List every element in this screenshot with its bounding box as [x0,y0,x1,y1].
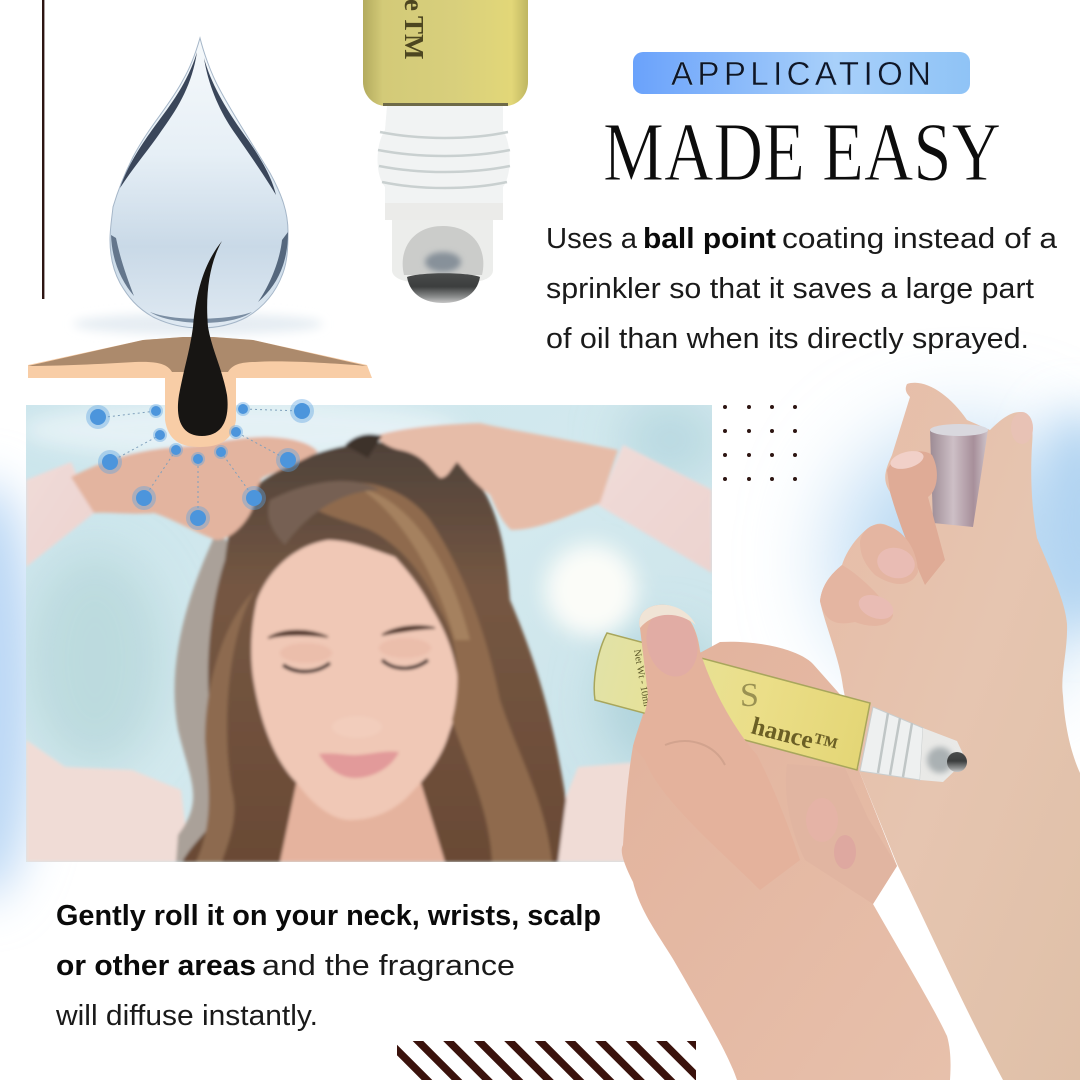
hands holding roller [594,383,1080,1080]
roller bottle in hand [594,633,967,782]
scalp diffusion network [86,399,314,530]
title: made easy: MADE EASY [603,106,1001,199]
text block: ball point description: ball point [643,223,776,255]
roller bottle in hand: S [740,677,759,714]
badge: application: APPLICATION [671,55,931,92]
front hair with highlights [300,483,552,862]
thumb over bottle [633,604,800,890]
hair strand [178,241,228,436]
skin cross-section [28,337,372,447]
roller bottle in hand: Net Wt - 10ml [631,649,652,708]
face [251,540,458,820]
fingertips under bottle [786,764,897,904]
nails [855,412,1033,623]
icon: silver cap [930,424,988,527]
neck [280,780,445,862]
middle finger [887,451,945,585]
text block: gently roll it: or other areas [56,950,256,982]
strands on crown [345,434,382,458]
eyes [283,663,330,672]
decorative diagonal stripes [397,1041,696,1080]
sleeves [26,462,94,567]
roller bottle in hand: hance™ [748,713,840,761]
text block: ball point description: sprinkler so that it saves a large part [546,273,1034,305]
text block: gently roll it: Gently roll it on your neck, wrists, scalp [56,900,601,932]
sweater shoulders [26,740,190,862]
eye lids [282,644,330,662]
dot grid [723,405,797,481]
text block: ball point description: coating instead of a [782,223,1058,255]
hair follicle illustration [28,38,372,447]
text block: ball point description: Uses a [546,223,638,255]
badge: application [633,52,970,94]
grey soft outer hair [172,537,229,862]
lower hand palm [622,642,951,1080]
text block: ball point description [546,223,1058,355]
nose shading [332,716,382,738]
pinky finger [820,565,893,626]
text block: ball point description: of oil than when its directly sprayed. [546,323,1029,355]
text block: gently roll it: will diffuse instantly. [55,1000,318,1032]
icon: water drop [73,38,323,335]
brows [268,631,328,638]
text block: gently roll it [55,900,601,1032]
decorative vertical rule [42,0,44,299]
mouth [319,751,399,778]
hands [71,437,318,540]
back hair [182,442,566,862]
text block: gently roll it: and the fragrance [262,950,515,982]
photo: woman touching hair [20,400,720,862]
upper hand and forearm [820,383,1080,1080]
roller bottle top: e TM [399,0,429,59]
ring finger [860,524,918,584]
page background glows [0,384,1080,915]
roller bottle top [363,0,528,303]
